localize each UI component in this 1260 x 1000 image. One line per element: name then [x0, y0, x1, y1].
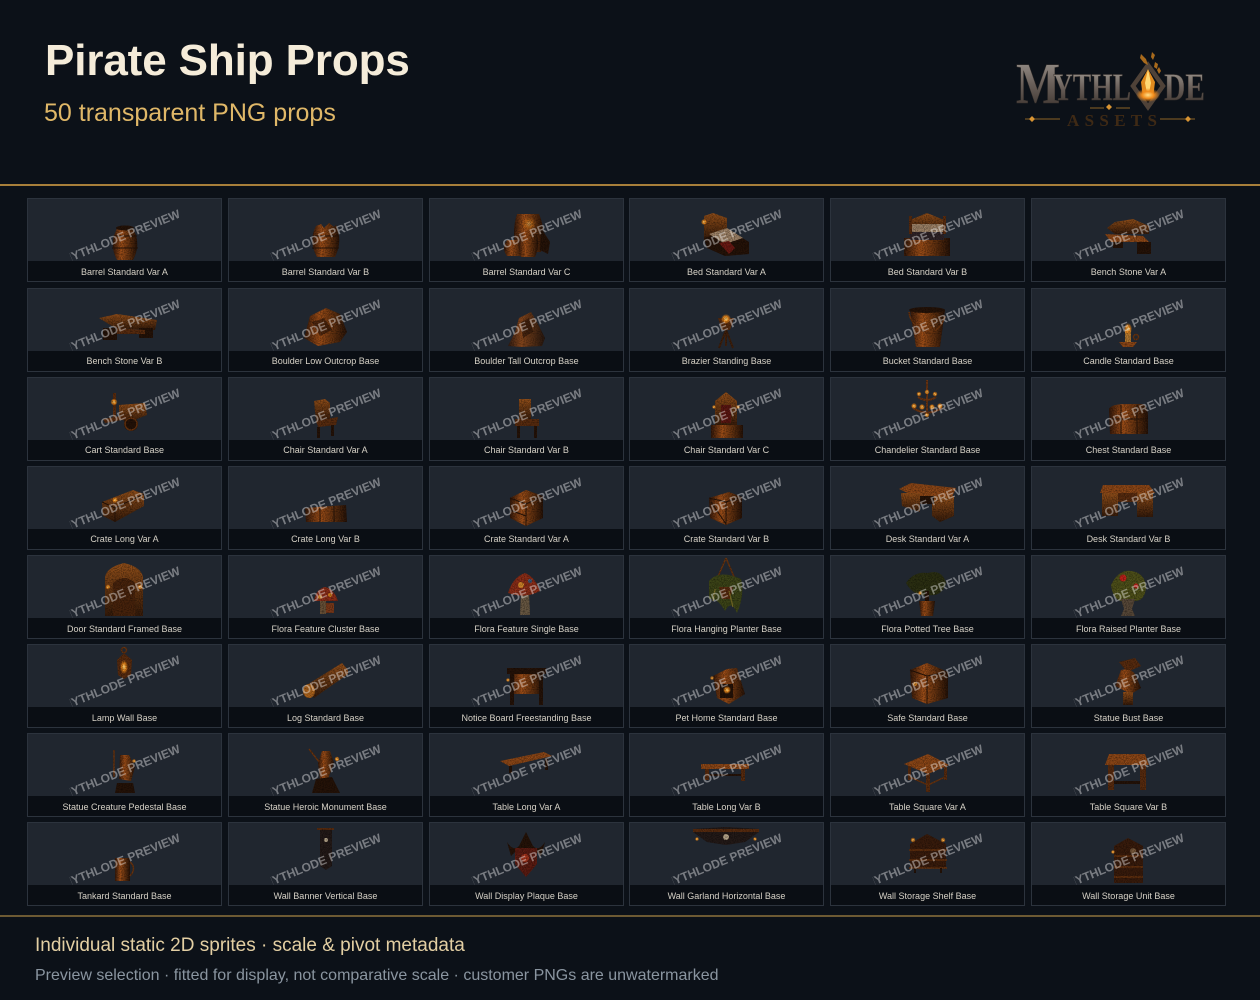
caption: Pet Home Standard Base — [675, 713, 778, 723]
caption — [1032, 440, 1225, 460]
caption — [229, 440, 422, 460]
card: Statue Bust Base — [1031, 644, 1226, 728]
logo: Mythlode Assets: DE — [1164, 66, 1205, 109]
divider: footer — [0, 915, 1260, 917]
icon: tall boulder — [508, 312, 545, 347]
card: Boulder Tall Outcrop Base — [429, 288, 624, 372]
caption — [1032, 707, 1225, 727]
icon: desk — [899, 483, 956, 522]
caption: Desk Standard Var B — [1087, 534, 1170, 544]
caption: Barrel Standard Var B — [282, 267, 369, 277]
caption — [430, 885, 623, 905]
icon: square table — [904, 754, 949, 792]
card: Notice Board Freestanding Base — [429, 644, 624, 728]
caption: Boulder Tall Outcrop Base — [474, 356, 579, 366]
card: Safe Standard Base — [830, 644, 1025, 728]
caption: Cart Standard Base — [85, 445, 164, 455]
caption — [430, 618, 623, 638]
caption — [831, 885, 1024, 905]
caption — [831, 440, 1024, 460]
card: Table Square Var A — [830, 733, 1025, 817]
icon: long table — [500, 752, 552, 773]
caption — [229, 261, 422, 281]
card: Table Long Var B — [629, 733, 824, 817]
card: Table Long Var A — [429, 733, 624, 817]
caption — [430, 529, 623, 549]
icon: wall banner — [317, 828, 334, 870]
caption — [630, 885, 823, 905]
icon: bed front — [904, 213, 950, 256]
icon: long stone bench — [99, 314, 157, 340]
caption: Statue Creature Pedestal Base — [62, 802, 187, 812]
card: Crate Standard Var B — [629, 466, 824, 550]
card: Table Square Var B — [1031, 733, 1226, 817]
card: Flora Feature Single Base — [429, 555, 624, 639]
caption: Statue Heroic Monument Base — [264, 802, 387, 812]
icon: open crate — [709, 492, 742, 525]
card: Candle Standard Base — [1031, 288, 1226, 372]
icon: long crate — [102, 490, 144, 522]
caption: Door Standard Framed Base — [67, 624, 182, 634]
caption — [430, 707, 623, 727]
icon: candle — [1119, 323, 1138, 347]
card: Statue Creature Pedestal Base — [27, 733, 222, 817]
caption: Chair Standard Var C — [684, 445, 769, 455]
card: Desk Standard Var B — [1031, 466, 1226, 550]
card: Wall Storage Shelf Base — [830, 822, 1025, 906]
icon: chair — [314, 399, 338, 438]
card: Pet Home Standard Base — [629, 644, 824, 728]
caption — [229, 351, 422, 371]
caption: Safe Standard Base — [887, 713, 968, 723]
caption — [430, 440, 623, 460]
caption — [630, 529, 823, 549]
card: Wall Garland Horizontal Base — [629, 822, 824, 906]
card: Barrel Standard Var C — [429, 198, 624, 282]
caption — [229, 796, 422, 816]
icon: wall plaque — [507, 832, 545, 877]
card: Bed Standard Var A — [629, 198, 824, 282]
icon: stone bench — [1105, 219, 1151, 254]
footer note: Preview selection · fitted for display, not comparative scale · customer PNGs are unwatermarked — [35, 967, 719, 984]
icon: heroic statue — [309, 749, 340, 793]
caption — [430, 796, 623, 816]
caption: Brazier Standing Base — [682, 356, 771, 366]
icon: creature statue — [114, 750, 136, 793]
card: Bucket Standard Base — [830, 288, 1025, 372]
caption — [430, 351, 623, 371]
card: Flora Hanging Planter Base — [629, 555, 824, 639]
card: Wall Storage Unit Base — [1031, 822, 1226, 906]
title: Pirate Ship Props — [45, 36, 410, 85]
caption: Lamp Wall Base — [92, 713, 157, 723]
card: Chandelier Standard Base — [830, 377, 1025, 461]
card: Crate Long Var B — [228, 466, 423, 550]
icon: potted tree — [906, 572, 946, 616]
card: Flora Raised Planter Base — [1031, 555, 1226, 639]
icon: captain bust — [1115, 658, 1141, 705]
caption: Barrel Standard Var A — [81, 267, 168, 277]
icon: chair — [515, 399, 539, 438]
caption: Flora Hanging Planter Base — [671, 624, 782, 634]
caption: Chest Standard Base — [1086, 445, 1171, 455]
card: Statue Heroic Monument Base — [228, 733, 423, 817]
caption: Bed Standard Var B — [888, 267, 967, 277]
icon: crate — [510, 490, 543, 526]
card: Wall Banner Vertical Base — [228, 822, 423, 906]
caption — [831, 707, 1024, 727]
caption — [630, 440, 823, 460]
caption — [229, 707, 422, 727]
icon: wall lantern — [117, 648, 132, 679]
icon: raised planter — [1111, 571, 1146, 616]
card: Tankard Standard Base — [27, 822, 222, 906]
caption: Candle Standard Base — [1083, 356, 1174, 366]
caption: Wall Display Plaque Base — [475, 891, 578, 901]
caption — [28, 885, 221, 905]
caption — [831, 351, 1024, 371]
caption — [28, 529, 221, 549]
caption — [831, 618, 1024, 638]
icon: tankard — [115, 858, 134, 881]
caption: Bucket Standard Base — [883, 356, 972, 366]
icon: notice board — [506, 668, 546, 705]
caption: Log Standard Base — [287, 713, 364, 723]
icon: cart — [103, 393, 147, 431]
icon: bucket — [909, 307, 945, 347]
card: Chair Standard Var B — [429, 377, 624, 461]
card: Flora Potted Tree Base — [830, 555, 1025, 639]
card: Cart Standard Base — [27, 377, 222, 461]
card: Chair Standard Var A — [228, 377, 423, 461]
icon: throne — [711, 392, 743, 438]
caption: Wall Storage Unit Base — [1082, 891, 1175, 901]
card: Brazier Standing Base — [629, 288, 824, 372]
caption — [1032, 796, 1225, 816]
caption — [1032, 529, 1225, 549]
card: Barrel Standard Var A — [27, 198, 222, 282]
caption: Barrel Standard Var C — [483, 267, 570, 277]
caption: Flora Potted Tree Base — [881, 624, 974, 634]
caption — [28, 440, 221, 460]
caption — [831, 261, 1024, 281]
card: Bench Stone Var A — [1031, 198, 1226, 282]
caption: Crate Long Var B — [291, 534, 360, 544]
caption — [831, 529, 1024, 549]
caption: Bench Stone Var B — [87, 356, 162, 366]
logo: Mythlode Assets: ASSETS — [1067, 111, 1157, 130]
icon: safe — [910, 663, 948, 704]
caption: Table Square Var B — [1090, 802, 1167, 812]
caption — [630, 707, 823, 727]
caption: Tankard Standard Base — [77, 891, 172, 901]
caption — [1032, 885, 1225, 905]
caption: Bench Stone Var A — [1091, 267, 1166, 277]
logo: Mythlode Assets — [1016, 51, 1205, 130]
card: Bench Stone Var B — [27, 288, 222, 372]
caption — [630, 796, 823, 816]
caption — [630, 351, 823, 371]
caption — [1032, 618, 1225, 638]
icon: broken barrel — [312, 223, 339, 257]
divider: header — [0, 184, 1260, 186]
caption — [1032, 261, 1225, 281]
icon: wall shelf — [909, 834, 947, 873]
caption: Wall Banner Vertical Base — [274, 891, 377, 901]
caption: Crate Long Var A — [90, 534, 159, 544]
card: Crate Long Var A — [27, 466, 222, 550]
subtitle: 50 transparent PNG props — [44, 99, 336, 127]
caption: Flora Raised Planter Base — [1076, 624, 1181, 634]
footer headline: Individual static 2D sprites · scale & pivot metadata — [35, 935, 465, 956]
card: Boulder Low Outcrop Base — [228, 288, 423, 372]
caption — [28, 261, 221, 281]
caption — [229, 885, 422, 905]
card: Flora Feature Cluster Base — [228, 555, 423, 639]
caption — [630, 261, 823, 281]
card: Crate Standard Var A — [429, 466, 624, 550]
caption: Desk Standard Var A — [886, 534, 969, 544]
icon: wall garland — [693, 827, 759, 845]
caption — [28, 707, 221, 727]
card: Chair Standard Var C — [629, 377, 824, 461]
logo: Mythlode Assets: M — [1016, 51, 1060, 116]
card: Log Standard Base — [228, 644, 423, 728]
icon: log — [303, 663, 348, 698]
caption — [28, 796, 221, 816]
caption — [229, 529, 422, 549]
caption: Flora Feature Cluster Base — [271, 624, 380, 634]
card: Wall Display Plaque Base — [429, 822, 624, 906]
icon: long crate front — [305, 505, 347, 522]
caption: Chair Standard Var A — [283, 445, 368, 455]
card: Lamp Wall Base — [27, 644, 222, 728]
logo: Mythlode Assets: YTHL — [1053, 66, 1131, 109]
caption — [430, 261, 623, 281]
caption: Wall Storage Shelf Base — [879, 891, 976, 901]
card: Barrel Standard Var B — [228, 198, 423, 282]
caption: Statue Bust Base — [1094, 713, 1163, 723]
caption — [1032, 351, 1225, 371]
caption — [630, 618, 823, 638]
icon: single mushroom — [508, 573, 540, 615]
icon: desk front — [1100, 485, 1155, 517]
icon: bed — [701, 213, 749, 256]
icon: wall storage unit — [1111, 838, 1143, 883]
caption: Flora Feature Single Base — [474, 624, 579, 634]
card: Desk Standard Var A — [830, 466, 1025, 550]
icon: hanging planter — [709, 558, 742, 613]
caption: Notice Board Freestanding Base — [461, 713, 592, 723]
icon: square table front — [1105, 754, 1149, 790]
card: Chest Standard Base — [1031, 377, 1226, 461]
caption: Wall Garland Horizontal Base — [668, 891, 785, 901]
caption: Crate Standard Var B — [684, 534, 769, 544]
caption: Table Square Var A — [889, 802, 966, 812]
icon: framed door — [105, 563, 143, 616]
card: Door Standard Framed Base — [27, 555, 222, 639]
icon: chandelier — [911, 380, 943, 418]
caption: Bed Standard Var A — [687, 267, 766, 277]
caption: Chair Standard Var B — [484, 445, 569, 455]
caption: Table Long Var A — [493, 802, 560, 812]
caption — [28, 618, 221, 638]
caption: Chandelier Standard Base — [875, 445, 980, 455]
icon: pet home — [710, 668, 745, 704]
icon: barrel group — [504, 214, 550, 257]
icon: barrel — [112, 226, 138, 260]
caption — [831, 796, 1024, 816]
icon: brazier — [718, 314, 734, 348]
caption: Boulder Low Outcrop Base — [272, 356, 379, 366]
caption: Table Long Var B — [692, 802, 761, 812]
icon: chest — [1109, 404, 1148, 434]
caption — [28, 351, 221, 371]
icon: long table front — [701, 764, 749, 781]
card: Bed Standard Var B — [830, 198, 1025, 282]
icon: mushroom cluster — [314, 587, 338, 614]
icon: low boulder — [304, 308, 347, 346]
caption: Crate Standard Var A — [484, 534, 569, 544]
caption — [229, 618, 422, 638]
